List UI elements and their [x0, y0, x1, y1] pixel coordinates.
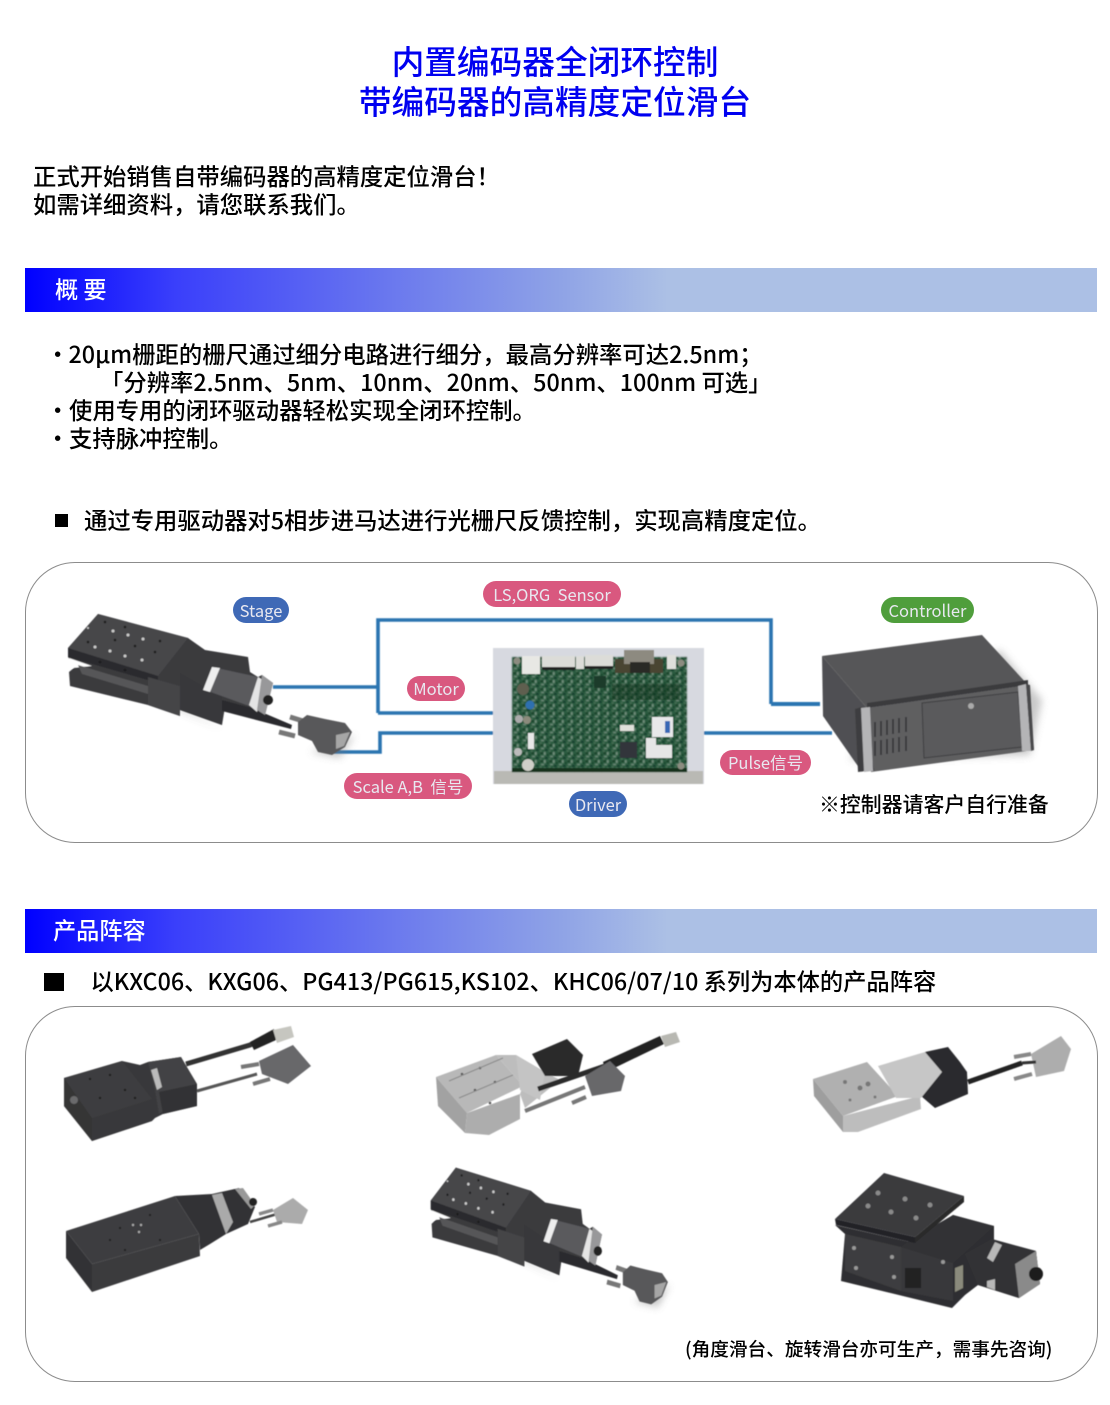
label: Stage: Stage [240, 598, 282, 622]
overview bullet list: ・ [46, 336, 69, 370]
panel: product lineup [25, 1006, 1098, 1382]
product: KXC06 stage [64, 1026, 311, 1141]
overview bullet list: 使用专用的闭环驱动器轻松实现全闭环控制。 [69, 392, 536, 426]
panel: system diagram [25, 562, 1098, 843]
driver board [493, 648, 704, 784]
product: dark compact stage with motor [835, 1173, 1043, 1308]
intro text: 如需详细资料，请您联系我们。 [33, 186, 360, 220]
overview bullet list: 20μm栅距的栅尺通过细分电路进行细分，最高分辨率可达2.5nm； [68, 336, 763, 370]
square bullet statement: 通过专用驱动器对5相步进马达进行光栅尺反馈控制，实现高精度定位。 [84, 502, 821, 536]
title [359, 37, 751, 124]
label: Pulse signal: Pulse信号 [728, 750, 803, 774]
controller illustration [822, 635, 1042, 772]
overview bullet list: ・ [46, 392, 69, 426]
label: Scale A,B signal: Scale A,B 信号 [353, 774, 463, 798]
overview bullet list: ・ [46, 420, 69, 454]
product: silver KXG06 stage [436, 1032, 680, 1135]
label: Motor: Motor [413, 676, 459, 700]
section header: overview: 概 要 [55, 271, 107, 305]
section header: product lineup [25, 909, 1097, 953]
label: Controller: Controller [889, 598, 966, 622]
overview bullet list: 「分辨率2.5nm、5nm、10nm、20nm、50nm、100nm 可选」 [100, 364, 771, 398]
product lineup statement: 以KXC06、KXG06、PG413/PG615,KS102、KHC06/07/10 系列为本体的产品阵容 [90, 963, 936, 997]
stage illustration [68, 614, 355, 758]
intro text [33, 158, 500, 220]
product: long dark stage [66, 1188, 308, 1292]
intro text: 正式开始销售自带编码器的高精度定位滑台！ [33, 158, 500, 192]
title: 内置编码器全闭环控制 [392, 37, 718, 84]
controller note: ※控制器请客户自行准备 [819, 789, 1049, 819]
product: silver stage with dark driver box [813, 1036, 1071, 1132]
title: 带编码器的高精度定位滑台 [359, 77, 751, 124]
product note: (角度滑台、旋转滑台亦可生产，需事先咨询) [685, 1335, 1052, 1362]
overview bullet list: 支持脉冲控制。 [69, 420, 232, 454]
section header: overview [25, 268, 1097, 312]
label: Driver: Driver [575, 792, 621, 816]
section header: product lineup: 产品阵容 [53, 912, 146, 946]
overview bullet list [46, 336, 771, 454]
connection lines [273, 620, 832, 752]
product: dark cross-roller stage [431, 1168, 670, 1307]
label: LS,ORG Sensor: LS,ORG Sensor [493, 582, 611, 606]
